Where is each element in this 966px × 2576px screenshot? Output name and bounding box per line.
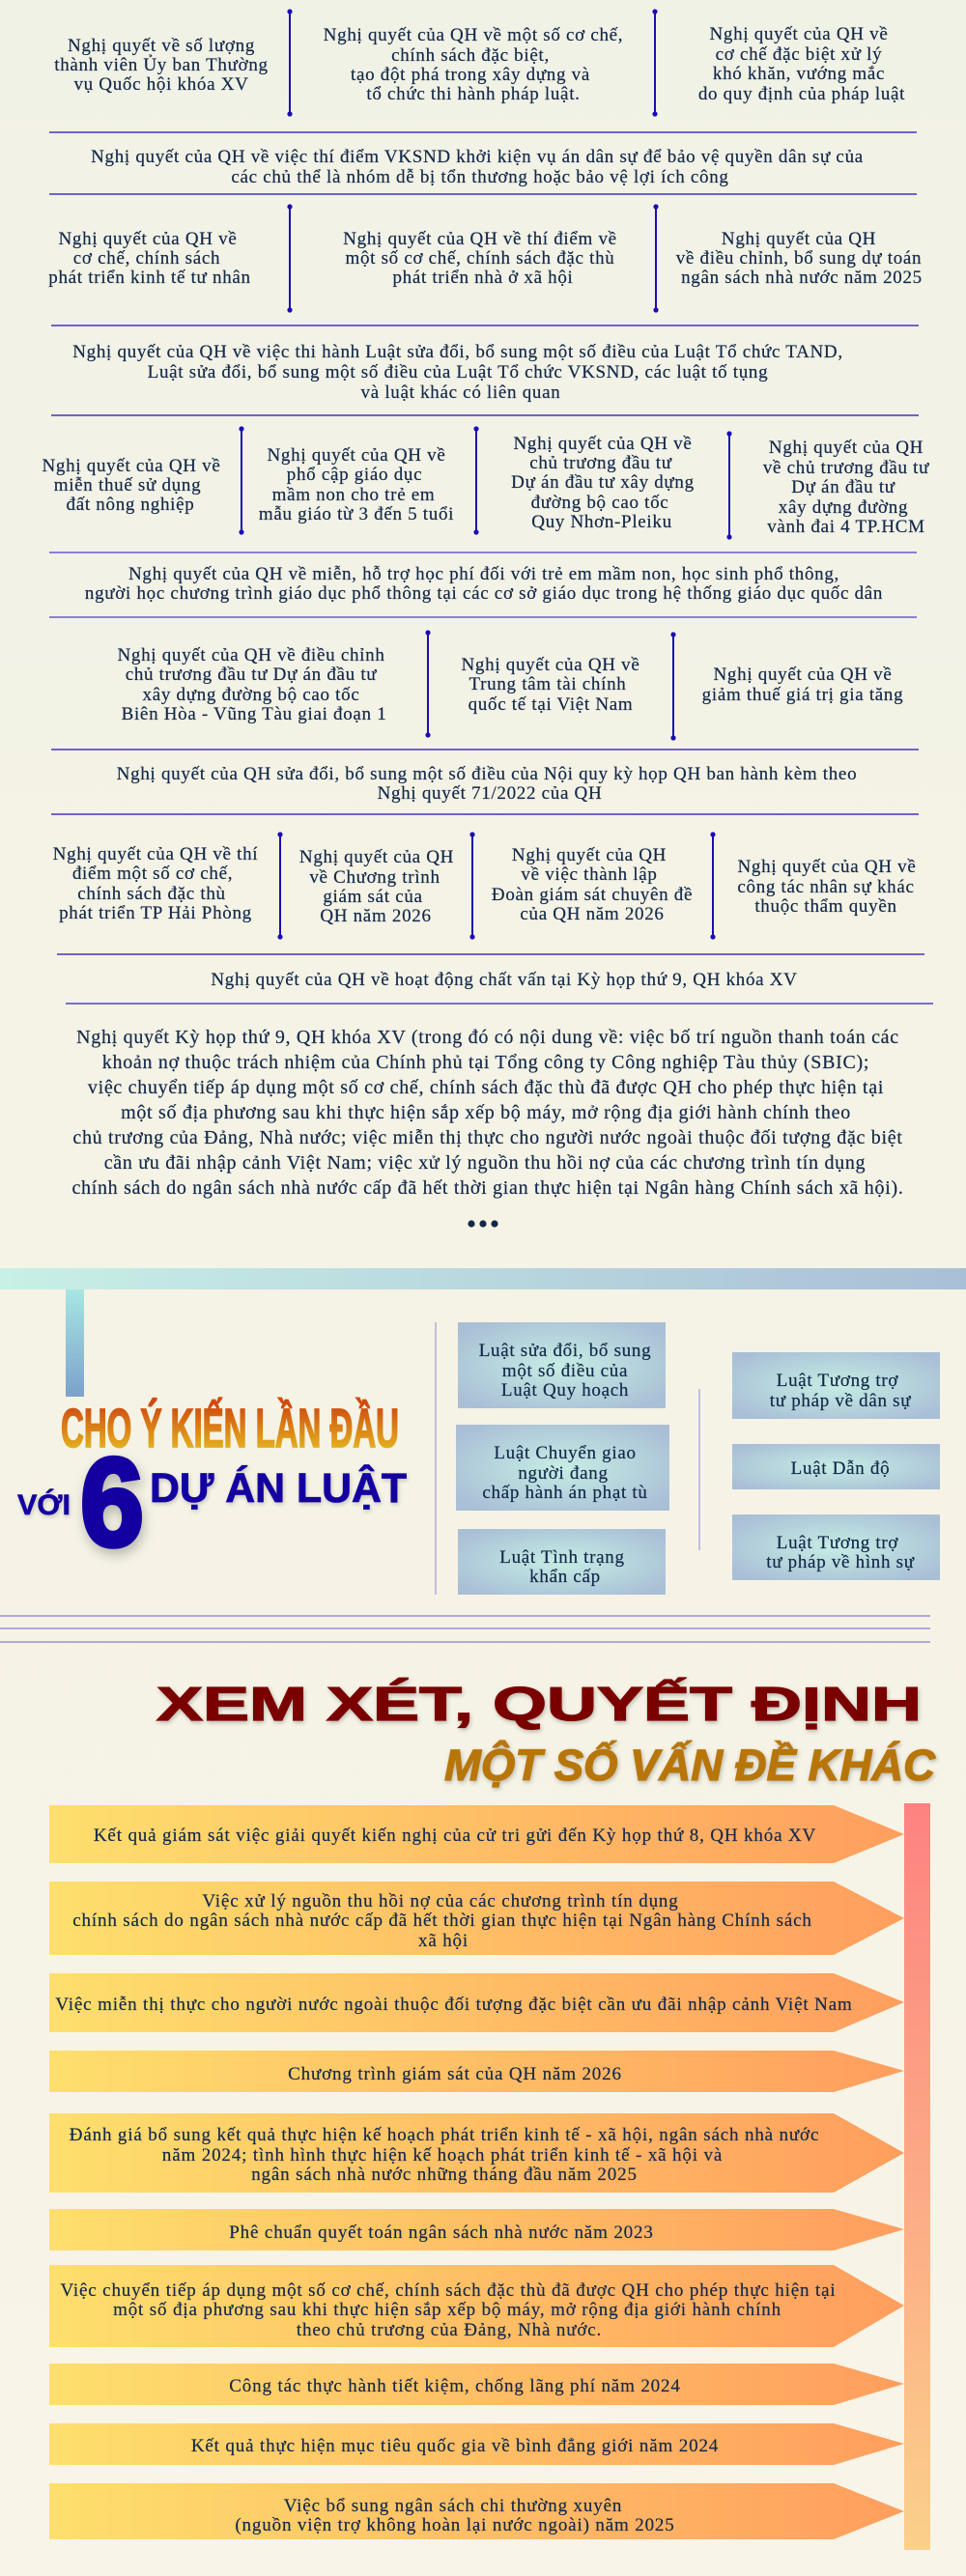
text: social housing: Nghị quyết của QH về thí điểm về [343,229,617,249]
heading word: với: VỚI [17,1488,71,1521]
panel: row 2 resolutions [48,204,923,313]
heading: review and decide: XEM XÉT, QUYẾT ĐỊNH [156,1679,922,1731]
text: ring road 4 HCMC: vành đai 4 TP.HCM [767,517,925,537]
panel: row 3 resolutions [43,426,929,540]
text: ring road 4 HCMC: xây dựng đường [779,497,908,518]
arrow 10: (nguồn viện trợ không hoàn lại nước ngoài) năm 2025 [235,2515,675,2535]
text: VAT reduction: Nghị quyết của QH về [714,665,892,685]
text: resolution on Standing Committee members: vụ Quốc hội khóa XV [73,74,249,95]
text: budget adjustment: Nghị quyết của QH [722,229,876,249]
divider with dots [653,204,659,313]
text: court organisation law: Nghị quyết của QH về việc thi hành Luật sửa đổi, bổ sung một số điều của Luật Tổ chức TAND, [72,342,843,362]
text: thematic supervision delegation: của QH năm 2026 [520,904,665,924]
text: court organisation law: và luật khác có liên quan [361,382,560,403]
box: Civil judicial assistance law: tư pháp về dân sự [770,1391,911,1411]
text: court organisation law: Luật sửa đổi, bổ sung một số điều của Luật Tổ chức VKSND, các luật tố tụng [148,362,768,382]
arrow 8: Công tác thực hành tiết kiệm, chống lãng phí năm 2024 [229,2376,681,2396]
text: supervision programme: Nghị quyết của QH [299,847,454,867]
text: session resolution paragraph: chủ trương của Đảng, Nhà nước; việc miễn thị thực cho người nước ngoài thuộc đối tượng đặc biệt [72,1127,903,1148]
text: thematic supervision delegation: về việc thành lập [521,864,658,885]
text: preschool education: mầm non cho trẻ em [272,485,435,505]
band: section separator [0,1268,966,1289]
text: Bien Hoa Vung Tau expressway: Biên Hòa - Vũng Tàu giai đoạn 1 [122,704,386,724]
box: State of emergency law: khẩn cấp [529,1567,601,1587]
heading word: dự án luật: DỰ ÁN LUẬT [150,1464,407,1512]
box: Transfer of sentenced persons law [456,1425,669,1511]
arrow 3: Việc miễn thị thực cho người nước ngoài thuộc đối tượng đặc biệt cần ưu đãi nhập cảnh Việt Nam [55,1995,853,2015]
arrow 2: chính sách do ngân sách nhà nước cấp đã hết thời gian thực hiện tại Ngân hàng Chính sách [72,1911,812,1931]
arrow 5: Đánh giá bổ sung kết quả thực hiện kế hoạch phát triển kinh tế - xã hội, ngân sách nhà nước [70,2125,819,2145]
divider with dots [469,832,475,940]
text: resolution on Standing Committee members: Nghị quyết về số lượng [68,36,255,56]
text: preschool education: phổ cập giáo dục [287,465,422,485]
box: Civil judicial assistance law: Luật Tương trợ [777,1371,898,1391]
text: special mechanisms for law making: chính sách đặc biệt, [391,45,550,66]
arrow 6 [49,2209,904,2250]
arrow 1 [49,1805,904,1863]
text: international financial centre: quốc tế tại Việt Nam [469,694,633,715]
arrow 10: Việc bổ sung ngân sách chi thường xuyên [284,2496,622,2516]
divider with dots [239,426,244,535]
divider with dots [287,204,293,313]
text: thematic supervision delegation: Đoàn giám sát chuyên đề [492,885,693,905]
text: handling legal obstacles: khó khăn, vướng mắc [713,64,885,84]
text: tuition exemption: người học chương trình giáo dục phổ thông tại các cơ sở giáo dục trong hệ thống giáo dục quốc dân [85,583,883,604]
text: Bien Hoa Vung Tau expressway: xây dựng đường bộ cao tốc [143,685,359,705]
panel: law boxes column 2 [732,1352,940,1580]
box: Planning law [458,1322,666,1408]
heading: some other issues: MỘT SỐ VẤN ĐỀ KHÁC [444,1741,937,1790]
arrow 5: ngân sách nhà nước những tháng đầu năm 2025 [251,2165,638,2185]
arrow 9: Kết quả thực hiện mục tiêu quốc gia về bình đẳng giới năm 2024 [191,2436,719,2456]
text: Quy Nhon Pleiku expressway: Dự án đầu tư xây dựng [511,472,695,493]
text: personnel: công tác nhân sự khác [737,877,915,897]
arrow 7: Việc chuyển tiếp áp dụng một số cơ chế, chính sách đặc thù đã được QH cho phép thực hiện tại [60,2280,837,2301]
text: Hai Phong: chính sách đặc thù [77,884,226,904]
text: session rules amendment: Nghị quyết 71/2022 của QH [378,783,602,804]
text: special mechanisms for law making: tổ chức thi hành pháp luật. [366,84,581,104]
text: personnel: thuộc thẩm quyền [754,896,897,917]
text: preschool education: Nghị quyết của QH về [268,445,445,466]
box: Extradition law [732,1444,940,1489]
arrow 5: năm 2024; tình hình thực hiện kế hoạch phát triển kinh tế - xã hội và [162,2145,723,2166]
text: supervision programme: QH năm 2026 [320,906,432,926]
big number 6: 6 [80,1431,144,1572]
heading line 1: CHO Ý KIẾN LẦN ĐẦU [61,1397,399,1459]
text: budget adjustment: về điều chỉnh, bổ sung dự toán [676,248,922,269]
text: international financial centre: Trung tâm tài chính [469,674,627,694]
text: handling legal obstacles: do quy định của pháp luật [698,84,905,104]
box: Planning law: Luật sửa đổi, bổ sung [479,1341,651,1361]
arrow 4 [49,2051,904,2092]
text: budget adjustment: ngân sách nhà nước năm 2025 [681,268,923,288]
text: social housing: một số cơ chế, chính sách đặc thù [345,248,615,269]
divider with dots [473,426,479,535]
arrow 8 [49,2364,904,2405]
divider with dots [425,630,431,738]
text: agricultural land tax: đất nông nghiệp [67,495,194,515]
text: session resolution paragraph: chính sách do ngân sách nhà nước cấp đã hết thời gian thực hiện tại Ngân hàng Chính sách xã hội). [71,1177,904,1199]
text: handling legal obstacles: cơ chế đặc biệt xử lý [716,44,882,65]
text: private economy: phát triển kinh tế tư nhân [48,268,251,288]
text: agricultural land tax: Nghị quyết của QH về [43,456,220,476]
text: agricultural land tax: miễn thuế sử dụng [54,475,201,495]
text: session resolution paragraph: việc chuyển tiếp áp dụng một số cơ chế, chính sách đặc thù đã được QH cho phép thực hiện tại [88,1077,884,1098]
text: supervision programme: về Chương trình [309,867,440,888]
box: Criminal judicial assistance law [732,1514,940,1580]
divider with dots [670,632,676,741]
text: Bien Hoa Vung Tau expressway: chủ trương đầu tư Dự án đầu tư [126,665,377,685]
arrow 4: Chương trình giám sát của QH năm 2026 [288,2064,622,2084]
arrow 2: Việc xử lý nguồn thu hồi nợ của các chương trình tín dụng [202,1891,679,1911]
text: Quy Nhon Pleiku expressway: Nghị quyết của QH về [514,434,692,454]
panel: row 1 resolutions [54,9,905,117]
text: international financial centre: Nghị quyết của QH về [462,655,639,675]
text: Hai Phong: Nghị quyết của QH về thí [53,844,258,864]
text: Quy Nhon Pleiku expressway: đường bộ cao tốc [531,493,668,513]
text: preschool education: mẫu giáo từ 3 đến 5 tuổi [259,504,454,524]
text: session rules amendment: Nghị quyết của QH sửa đổi, bổ sung một số điều của Nội quy kỳ họp QH ban hành kèm theo [117,764,857,784]
text: VAT reduction: giảm thuế giá trị gia tăng [702,685,903,705]
arrow 10 [49,2483,904,2539]
text: personnel: Nghị quyết của QH về [738,857,916,877]
box: Transfer of sentenced persons law: chấp hành án phạt tù [482,1483,648,1503]
arrow 7 [49,2265,904,2347]
divider with dots [287,9,293,117]
box: Transfer of sentenced persons law: Luật Chuyển giao [494,1443,637,1463]
box: Extradition law: Luật Dẫn độ [791,1458,890,1479]
divider with dots [652,9,658,117]
arrow 7: theo chủ trương của Đảng, Nhà nước. [297,2320,602,2340]
right vertical bar [904,1803,930,2550]
arrow 9 [49,2423,904,2465]
arrow 2: xã hội [418,1931,469,1951]
panel: law boxes column 1 [456,1322,669,1595]
text: session resolution paragraph: khoản nợ thuộc trách nhiệm của Chính phủ tại Tổng công ty Công nghiệp Tàu thủy (SBIC); [102,1052,869,1073]
text: ring road 4 HCMC: Dự án đầu tư [791,477,895,497]
heading: first opinions on 6 draft laws [17,1397,407,1572]
text: Bien Hoa Vung Tau expressway: Nghị quyết của QH về điều chỉnh [117,645,385,665]
text: handling legal obstacles: Nghị quyết của QH về [710,24,888,44]
panel: row 4 resolutions [117,630,903,741]
text: resolution on Standing Committee members: thành viên Ủy ban Thường [54,54,269,75]
text: Quy Nhon Pleiku expressway: chủ trương đầu tư [529,453,672,473]
divider with dots [726,431,732,540]
arrow 3 [49,1973,904,2032]
text: session resolution paragraph: Nghị quyết Kỳ họp thứ 9, QH khóa XV (trong đó có nội dung về: việc bố trí nguồn thanh toán các [76,1027,899,1048]
text: private economy: Nghị quyết của QH về [59,229,237,249]
text: private economy: cơ chế, chính sách [73,248,220,269]
text: session resolution paragraph: cần ưu đãi nhập cảnh Việt Nam; việc xử lý nguồn thu hồi nợ của các chương trình tín dụng [104,1152,866,1174]
box: Criminal judicial assistance law: Luật Tương trợ [777,1533,898,1553]
text: VKSND civil lawsuit pilot: các chủ thể là nhóm dễ bị tổn thương hoặc bảo vệ lợi ích công [231,167,729,187]
arrow 6: Phê chuẩn quyết toán ngân sách nhà nước năm 2023 [229,2222,654,2243]
text: special mechanisms for law making: Nghị quyết của QH về một số cơ chế, [324,25,623,45]
box: Criminal judicial assistance law: tư pháp về hình sự [766,1552,915,1572]
text: social housing: phát triển nhà ở xã hội [392,268,574,288]
arrow list: other issues [49,1805,904,2539]
text: ring road 4 HCMC: Nghị quyết của QH [769,438,923,458]
arrow 7: một số địa phương sau khi thực hiện sắp xếp bộ máy, mở rộng địa giới hành chính [113,2300,781,2320]
panel: row 5 resolutions [53,832,916,940]
arrow 1: Kết quả giám sát việc giải quyết kiến nghị của cử tri gửi đến Kỳ họp thứ 8, QH khóa XV [94,1826,816,1846]
text: questioning activity: Nghị quyết của QH về hoạt động chất vấn tại Kỳ họp thứ 9, QH khóa XV [211,970,798,990]
text: thematic supervision delegation: Nghị quyết của QH [512,845,667,865]
text: session resolution paragraph: một số địa phương sau khi thực hiện sắp xếp bộ máy, mở rộng địa giới hành chính theo [121,1102,851,1123]
text: Hai Phong: phát triển TP Hải Phòng [59,903,252,923]
box: Transfer of sentenced persons law: người đang [518,1463,609,1484]
vertical accent bar [66,1289,84,1397]
icon: three dots [468,1220,498,1228]
divider with dots [277,832,283,940]
text: special mechanisms for law making: tạo đột phá trong xây dựng và [351,65,590,85]
box: Planning law: một số điều của [502,1361,628,1381]
arrow 5 [49,2113,904,2193]
text: ring road 4 HCMC: về chủ trương đầu tư [763,458,929,478]
box: Civil judicial assistance law [732,1352,940,1419]
text: supervision programme: giám sát của [323,887,423,907]
text: tuition exemption: Nghị quyết của QH về miễn, hỗ trợ học phí đối với trẻ em mầm non, học sinh phổ thông, [128,564,839,584]
divider with dots [710,832,716,940]
text: VKSND civil lawsuit pilot: Nghị quyết của QH về việc thí điểm VKSND khởi kiện vụ án dân sự để bảo vệ quyền dân sự của [91,147,864,167]
box: Planning law: Luật Quy hoạch [501,1380,629,1401]
text: Quy Nhon Pleiku expressway: Quy Nhơn-Pleiku [531,512,672,532]
text: Hai Phong: điểm một số cơ chế, [72,863,233,884]
arrow 2 [49,1882,904,1955]
box: State of emergency law [458,1529,666,1595]
box: State of emergency law: Luật Tình trạng [499,1547,625,1568]
